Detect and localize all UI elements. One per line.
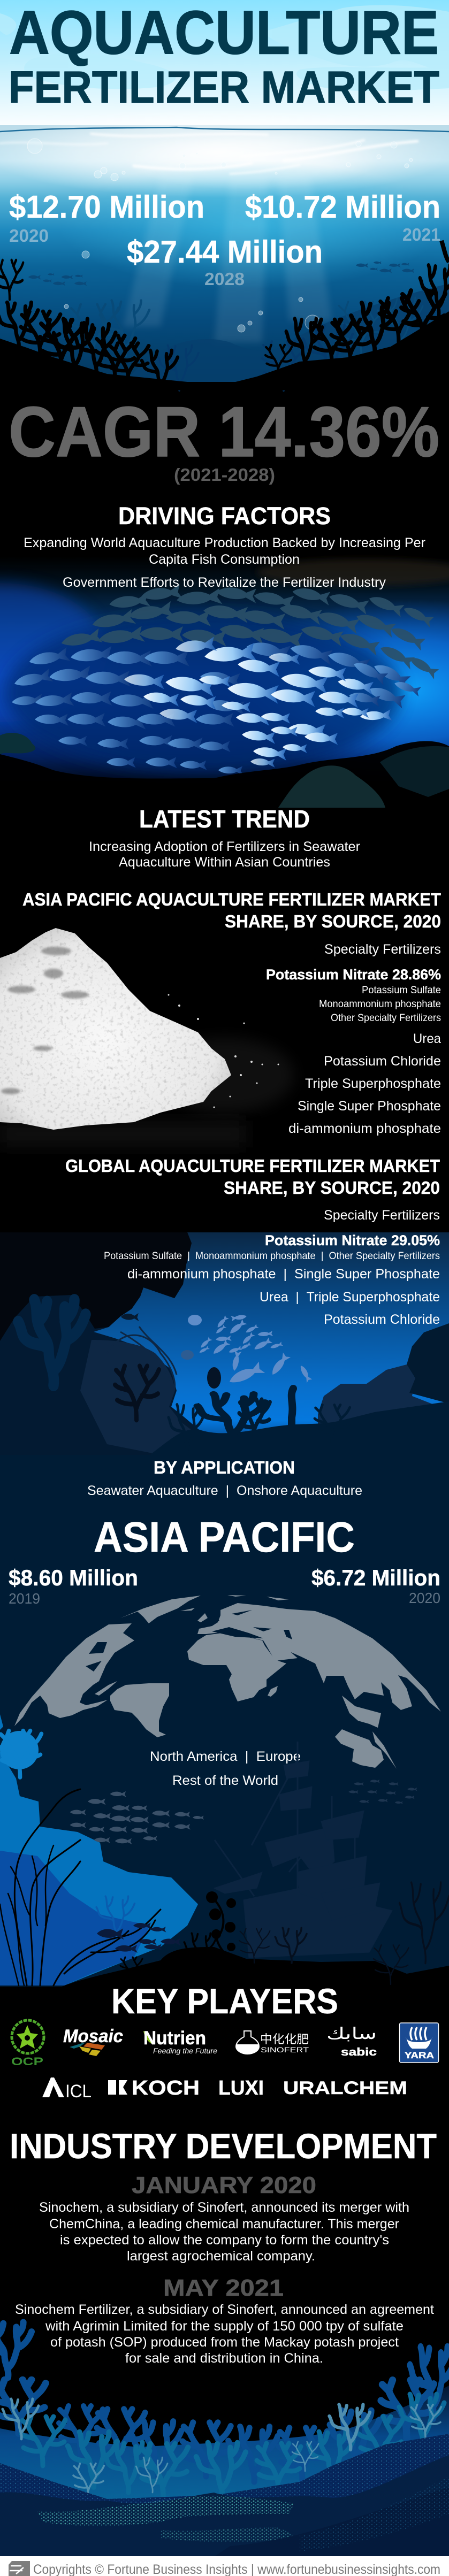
- school shadow: [5, 612, 401, 773]
- text block: May 2021: for sale and distribution in China.: [125, 2351, 323, 2366]
- text block: latest trend: [89, 839, 360, 870]
- logo: SABIC: [326, 2025, 377, 2058]
- background corals: [123, 283, 449, 385]
- text block: latest trend: Increasing Adoption of Fertilizers in Seawater: [89, 839, 360, 854]
- list: asia pacific sources: Potassium Nitrate 28.86%: [266, 967, 441, 983]
- logo: Nutrien: [143, 2028, 217, 2055]
- asia pacific value 2020: $6.72 Million: [311, 1565, 440, 1590]
- background fish: [28, 261, 414, 286]
- list: asia pacific sources: Other Specialty Fertilizers: [331, 1013, 441, 1024]
- market value 2020: 2020: [9, 226, 49, 246]
- Greenland: [120, 1596, 201, 1623]
- text block: January 2020: [39, 2172, 409, 2264]
- list: global sources: Potassium Sulfate | Monoammonium phosphate | Other Specialty Fertilizers: [104, 1251, 440, 1262]
- North America: [14, 1623, 134, 1726]
- logo: Nutrien: Nutrien: [143, 2028, 206, 2049]
- foreground corals: [169, 1389, 350, 1455]
- heading: global share: SHARE, BY SOURCE, 2020: [224, 1178, 440, 1198]
- heading: asia pacific share: [22, 890, 441, 931]
- logo: SABIC: sabic: [341, 2046, 377, 2058]
- list: asia pacific sources: Monoammonium phosphate: [319, 999, 441, 1010]
- panel: sky and title: [0, 0, 449, 126]
- text block: regions: Rest of the World: [172, 1773, 278, 1788]
- corals: [0, 2322, 449, 2482]
- icon: Fortune Business Insights logo: [9, 2561, 30, 2576]
- fish group: [188, 1313, 313, 1388]
- logo: Yara: YARA: [405, 2050, 434, 2060]
- market value 2028: $27.44 Million: [127, 234, 323, 270]
- heading: global share: [65, 1156, 440, 1198]
- list: asia pacific sources: Specialty Fertilizers: [324, 942, 441, 957]
- list: asia pacific sources: di-ammonium phosphate: [288, 1121, 441, 1136]
- black corals: [0, 241, 449, 390]
- SE Asia islands: [342, 1696, 381, 1728]
- logo: OCP: OCP: [11, 2056, 43, 2068]
- bubbles: [27, 139, 413, 332]
- text block: driving factors: Government Efforts to Revitalize the Fertilizer Industry: [63, 575, 386, 590]
- seabed fill: [150, 1401, 449, 1458]
- logo: Mosaic: Mosaic: [63, 2026, 123, 2046]
- text block: January 2020: largest agrochemical company.: [127, 2249, 315, 2264]
- black seabed: [0, 311, 449, 390]
- market value 2021: 2021: [402, 225, 440, 244]
- shipwreck: [214, 1742, 392, 1958]
- fish: dim upper school: [60, 584, 440, 679]
- asia pacific value 2019: $8.60 Million: [9, 1565, 138, 1590]
- logo: SABIC: سابك: [326, 2025, 377, 2043]
- market value 2021: [245, 189, 440, 244]
- text block: driving factors: Capita Fish Consumption: [149, 552, 300, 567]
- title: [9, 0, 439, 112]
- logo: ICL: [42, 2077, 92, 2102]
- logo: Koch: KOCH: [132, 2077, 200, 2099]
- Australia: [335, 1729, 384, 1768]
- heading: key players: KEY PLAYERS: [111, 1981, 338, 2021]
- text block: regions: [150, 1749, 301, 1788]
- text block: regions: North America | Europe: [150, 1749, 301, 1764]
- list: asia pacific sources: Urea: [413, 1031, 441, 1046]
- right fish school: [348, 1780, 417, 1804]
- tall left coral: [18, 1300, 86, 1385]
- text block: May 2021: MAY 2021: [163, 2275, 284, 2301]
- reef silhouettes: [0, 741, 449, 813]
- list: global sources: Potassium Nitrate 29.05%: [265, 1232, 440, 1248]
- black upper silhouette: [0, 1232, 192, 1341]
- logo: Koch: [108, 2077, 200, 2099]
- heading: by application: [87, 1458, 362, 1498]
- market value 2020: [9, 189, 204, 246]
- panel: fish school image: [0, 556, 449, 813]
- world map globe: [14, 1595, 441, 1769]
- list: asia pacific sources: [266, 942, 441, 1136]
- logo: ICL: ICL: [65, 2081, 92, 2102]
- heading: driving factors: DRIVING FACTORS: [118, 502, 331, 530]
- market value 2021: $10.72 Million: [245, 189, 440, 225]
- asia pacific value 2019: [9, 1565, 138, 1607]
- South America: [110, 1683, 169, 1737]
- fish: blue mid school: [11, 640, 422, 775]
- text block: January 2020: Sinochem, a subsidiary of Sinofert, announced its merger with: [39, 2200, 409, 2215]
- list: global sources: Specialty Fertilizers: [324, 1208, 440, 1223]
- heading: asia pacific share: SHARE, BY SOURCE, 2020: [225, 911, 441, 931]
- logo: Sinofert: 中化化肥: [260, 2030, 309, 2047]
- left blue reef: [0, 1752, 198, 1985]
- heading: asia pacific: ASIA PACIFIC: [94, 1513, 355, 1561]
- text block: January 2020: is expected to allow the company to form the country's: [60, 2233, 389, 2248]
- panel: bottom coral bed: [0, 2322, 449, 2557]
- CAGR callout: (2021-2028): [174, 465, 275, 485]
- clouds: [0, 5, 449, 91]
- grey fish school: [70, 1791, 204, 1844]
- heading: by application: Seawater Aquaculture | Onshore Aquaculture: [87, 1483, 362, 1498]
- mid mass and sea fans: [80, 1340, 203, 1455]
- footer band: [0, 2556, 449, 2576]
- black ground: [59, 1947, 449, 1990]
- left navy mass: [0, 1232, 252, 1455]
- seabed layers: [0, 2434, 449, 2557]
- text block: May 2021: Sinochem Fertilizer, a subsidiary of Sinofert, announced an agreement: [15, 2302, 434, 2317]
- text block: January 2020: ChemChina, a leading chemical manufacturer. This merger: [49, 2217, 399, 2232]
- text block: May 2021: of potash (SOP) produced from the Mackay potash project: [50, 2335, 399, 2350]
- list: global sources: di-ammonium phosphate | Single Super Phosphate: [127, 1267, 440, 1282]
- market value 2020: $12.70 Million: [9, 189, 204, 225]
- text block: May 2021: with Agrimin Limited for the supply of 150 000 tpy of sulfate: [45, 2319, 404, 2334]
- logo: Mosaic: [63, 2026, 123, 2056]
- Eurasia: [197, 1603, 441, 1712]
- text block: latest trend: Aquaculture Within Asian Countries: [119, 855, 330, 870]
- market value 2028: [127, 234, 323, 289]
- fish: brightly lit school: [124, 637, 392, 768]
- image: fertilizer powder pile: [0, 928, 294, 1147]
- logo: OCP: [11, 2020, 44, 2068]
- asia pacific value 2020: 2020: [409, 1590, 440, 1606]
- list: global sources: Urea | Triple Superphosphate: [260, 1290, 440, 1305]
- logo: Sinofert: [236, 2030, 309, 2054]
- asia pacific value 2019: 2019: [9, 1590, 40, 1607]
- light rays: [123, 177, 332, 342]
- black plants: [0, 1789, 161, 1985]
- text block: May 2021: [15, 2275, 434, 2366]
- logo: Uralchem: URALCHEM: [283, 2078, 407, 2098]
- Africa: [187, 1632, 286, 1701]
- list: asia pacific sources: Potassium Chloride: [324, 1054, 441, 1069]
- list: global sources: [104, 1208, 440, 1327]
- logo: Nutrien: Feeding the Future: [153, 2046, 217, 2055]
- text block: January 2020: JANUARY 2020: [132, 2172, 316, 2198]
- list: asia pacific sources: Triple Superphosphate: [305, 1076, 441, 1091]
- text block: driving factors: [24, 535, 425, 590]
- logo: Luxi: LUXI: [218, 2077, 264, 2099]
- right reef masses: [318, 1364, 449, 1455]
- panel: underwater scene with market values: [0, 107, 449, 390]
- water surface: [0, 127, 449, 132]
- text block: driving factors: Expanding World Aquaculture Production Backed by Increasing Per: [24, 535, 425, 550]
- market value 2028: 2028: [204, 269, 245, 289]
- heading: driving factors: [24, 502, 425, 590]
- Central America: [95, 1681, 117, 1696]
- list: global sources: Potassium Chloride: [324, 1312, 440, 1327]
- heading: by application: BY APPLICATION: [154, 1458, 295, 1477]
- logo: Yara: [399, 2023, 439, 2063]
- heading: latest trend: LATEST TREND: [139, 805, 310, 833]
- panel: shipwreck reef scene: [0, 1714, 449, 1990]
- list: asia pacific sources: Potassium Sulfate: [362, 985, 441, 996]
- list: asia pacific sources: Single Super Phosphate: [298, 1099, 441, 1114]
- logo: Sinofert: SINOFERT: [261, 2045, 309, 2054]
- asia pacific value 2020: [311, 1565, 440, 1606]
- heading: latest trend: [89, 805, 360, 870]
- panel: reef scene: [0, 1232, 449, 1458]
